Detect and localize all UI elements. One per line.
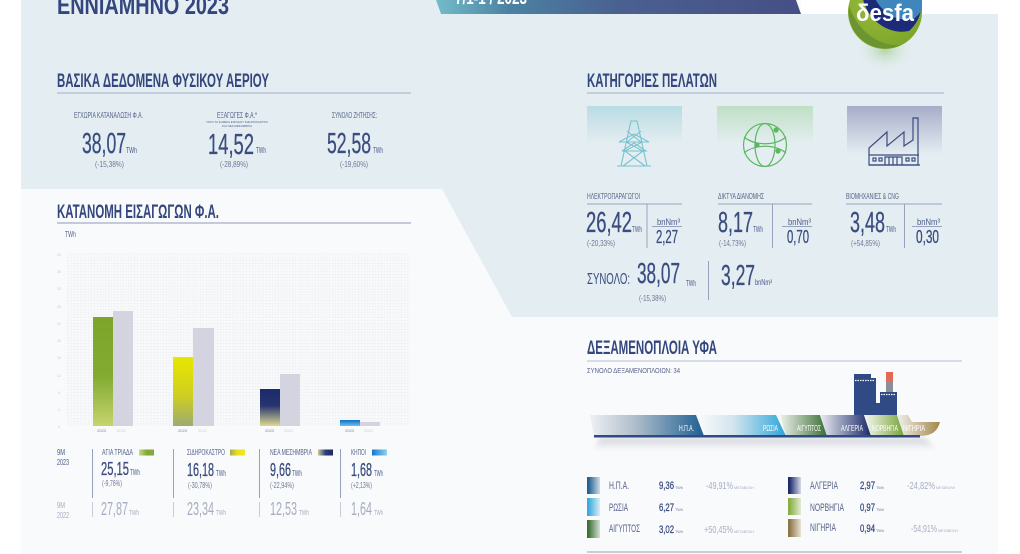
- entry point: Kipoi: TWh: [374, 510, 383, 517]
- logo: desfa: δesfa: [856, 0, 915, 27]
- customer totals: 3,27: [721, 260, 755, 292]
- customer: distribution networks: 0,70: [787, 227, 809, 247]
- customer: industry and CNG: bnNm³: [917, 217, 940, 228]
- customer: distribution networks: [718, 191, 812, 248]
- bar chart: 8: [58, 391, 60, 395]
- ship illustration: ΝΙΓΗΡΙΑ: [903, 424, 925, 433]
- entry point: Nea Mesimvria: [259, 447, 333, 519]
- bar chart: 2022: [198, 428, 208, 433]
- stat: total demand: ΣΥΝΟΛΟ ΖΗΤΗΣΗΣ:: [332, 110, 377, 120]
- legend row: Algeria: ΑΛΓΕΡΙΑ: [810, 480, 838, 492]
- ship illustration: ΡΩΣΙΑ: [763, 424, 778, 433]
- stat: total demand: (-19,60%): [340, 160, 368, 169]
- customer: distribution networks: ΔΙΚΤΥΑ ΔΙΑΝΟΜΗΣ: [718, 191, 764, 201]
- entry point: Sidirokastro: TWh: [216, 510, 226, 517]
- entry point: Kipoi: (+2,13%): [351, 481, 372, 490]
- entry point: Sidirokastro: ΣΙΔΗΡΟΚΑΣΤΡΟ: [187, 447, 225, 457]
- bar chart: 2022: [284, 428, 294, 433]
- legend row: Norway: TWh: [876, 507, 884, 512]
- entry point: Agia Triada: (-9,76%): [102, 479, 122, 488]
- legend row: Nigeria: 0,94: [860, 523, 875, 535]
- legend row: Algeria: -24,82%: [907, 480, 935, 492]
- legend row: Russia: ΡΩΣΙΑ: [609, 502, 628, 514]
- entry point: Kipoi: 1,64: [351, 499, 372, 519]
- ship illustration: ΝΟΡΒΗΓΙΑ: [872, 424, 898, 433]
- stat: exports: (-28,89%): [220, 160, 248, 169]
- customer: distribution networks: bnNm³: [788, 217, 811, 228]
- customer: distribution networks: (-14,73%): [719, 239, 746, 248]
- entry point: Kipoi: ΚΗΠΟΙ: [351, 447, 366, 457]
- bar chart: 28: [57, 305, 61, 309]
- customer totals: [587, 258, 772, 303]
- stat: exports: ΕΞΑΓΩΓΕΣ Φ.Α.*: [217, 110, 257, 120]
- legend row: Algeria: [788, 477, 955, 494]
- entry point: Agia Triada: 25,15: [101, 459, 129, 479]
- entry point: Nea Mesimvria: ΝΕΑ ΜΕΣΗΜΒΡΙΑ: [270, 447, 312, 457]
- customer totals: ΣΥΝΟΛΟ:: [587, 271, 630, 288]
- bar chart: 32: [57, 287, 61, 291]
- entry point: Nea Mesimvria: 9,66: [270, 460, 291, 480]
- entry point: Agia Triada: ΑΓΙΑ ΤΡΙΑΔΑ: [102, 447, 133, 457]
- customer: industry and CNG: (+54,85%): [851, 239, 880, 248]
- legend row: Russia: TWh: [675, 507, 683, 512]
- legend row: USA: -49,91%: [706, 480, 733, 492]
- customer totals: (-15,38%): [639, 294, 666, 303]
- ship illustration: [590, 372, 940, 450]
- heading: ΒΑΣΙΚΑ ΔΕΔΟΜΕΝΑ ΦΥΣΙΚΟΥ ΑΕΡΙΟΥ: [57, 71, 269, 92]
- legend row: USA: [587, 477, 754, 494]
- heading: ΚΑΤΑΝΟΜΗ ΕΙΣΑΓΩΓΩΝ Φ.Α.: [57, 202, 219, 223]
- customer: power producers: 2,27: [656, 227, 678, 247]
- customer: power producers: [586, 191, 682, 248]
- legend row: Egypt: 3,02: [659, 524, 674, 536]
- bar chart: TWh: [65, 229, 76, 239]
- panel: customer categories: [586, 71, 944, 303]
- customer: distribution networks: TWh: [753, 225, 763, 234]
- ship illustration: ΑΛΓΕΡΙΑ: [841, 424, 863, 433]
- legend row: USA: Η.Π.Α.: [609, 480, 629, 492]
- bar chart: 2023: [345, 428, 355, 433]
- customer: industry and CNG: TWh: [886, 225, 896, 234]
- entry point: Nea Mesimvria: (-22,94%): [270, 481, 294, 490]
- bar chart: 16: [57, 356, 61, 360]
- bar chart: 40: [57, 253, 61, 257]
- customer: industry and CNG: ΒΙΟΜΗΧΑΝΙΕΣ & CNG: [846, 191, 899, 201]
- legend row: Nigeria: ΝΙΓΗΡΙΑ: [810, 522, 836, 534]
- entry point: Kipoi: [340, 447, 387, 519]
- customer: power producers: (-20,33%): [587, 239, 615, 248]
- stat: domestic consumption: ΕΓΧΩΡΙΑ ΚΑΤΑΝΑΛΩΣΗ Φ.Α.: [74, 110, 143, 120]
- stat: exports: [206, 110, 269, 169]
- entry point: Sidirokastro: TWh: [216, 469, 226, 478]
- panel: LNG tankers: [587, 338, 962, 552]
- bar chart: 4: [58, 408, 60, 412]
- stat: exports: 14,52: [208, 129, 254, 161]
- stat: total demand: TWh: [373, 146, 383, 155]
- legend row: USA: TWh: [675, 485, 683, 490]
- bar chart: 24: [57, 322, 61, 326]
- legend row: Algeria: TWh: [876, 485, 884, 490]
- entry point: Sidirokastro: 16,18: [187, 460, 214, 480]
- stat: exports: ΚΑΙ ΝΕΑ ΜΕΣΗΜΒΡΙΑ: [222, 124, 252, 128]
- stat: exports: TWh: [256, 146, 266, 155]
- entry point: Agia Triada: 27,87: [101, 499, 128, 519]
- legend row: Egypt: +50,45%: [704, 524, 733, 536]
- customer totals: bnNm³: [755, 278, 772, 287]
- customer: power producers: TWh: [632, 225, 642, 234]
- bar chart: 2022: [364, 428, 374, 433]
- stat: domestic consumption: (-15,38%): [95, 160, 124, 169]
- stat: domestic consumption: TWh: [126, 146, 137, 155]
- customer: distribution networks: 8,17: [718, 207, 753, 239]
- bar chart: 36: [57, 270, 61, 274]
- ship illustration: Η.Π.Α.: [679, 424, 694, 433]
- legend row: Nigeria: [788, 519, 958, 537]
- date banner: [436, 0, 801, 14]
- bar chart: 0: [58, 425, 60, 429]
- total tankers: ΣΥΝΟΛΟ ΔΕΞΑΜΕΝΟΠΛΟΙΩΝ: 34: [587, 366, 680, 375]
- row labels: 9M 2023 and 9M 2022: 9M: [57, 447, 65, 457]
- customer: power producers: ΗΛΕΚΤΡΟΠΑΡΑΓΩΓΟΙ: [587, 191, 640, 201]
- legend row: Algeria: ΜΕΤΑΒΟΛΗ: [936, 485, 955, 490]
- row labels: 9M 2023 and 9M 2022: 9M: [57, 500, 65, 510]
- bar chart: 20: [57, 339, 61, 343]
- legend row: Egypt: ΜΕΤΑΒΟΛΗ: [734, 529, 754, 534]
- customer: power producers: bnNm³: [657, 217, 680, 228]
- legend row: Nigeria: TWh: [876, 528, 884, 533]
- legend row: Russia: 6,27: [659, 502, 674, 514]
- legend row: Norway: ΝΟΡΒΗΓΙΑ: [810, 502, 844, 514]
- bar chart: 2023: [97, 428, 107, 433]
- entry point: Nea Mesimvria: 12,53: [270, 499, 297, 519]
- bar chart: 2023: [178, 428, 188, 433]
- legend row: Nigeria: -54,91%: [911, 523, 937, 535]
- entry point: Sidirokastro: 23,34: [187, 499, 214, 519]
- legend row: Egypt: [587, 520, 754, 538]
- icon: factory: [847, 106, 942, 170]
- ship illustration: ΑΙΓΥΠΤΟΣ: [797, 424, 821, 433]
- customer totals: 38,07: [637, 258, 680, 290]
- icon: globe network: [717, 106, 813, 168]
- legend row: Egypt: TWh: [675, 529, 683, 534]
- stat: total demand: [327, 110, 383, 169]
- heading: ΚΑΤΗΓΟΡΙΕΣ ΠΕΛΑΤΩΝ: [587, 71, 717, 92]
- heading: ΔΕΞΑΜΕΝΟΠΛΟΙΑ ΥΦΑ: [587, 338, 717, 359]
- entry point: Agia Triada: TWh: [130, 468, 140, 477]
- legend row: Norway: 0,97: [860, 502, 875, 514]
- legend row: USA: ΜΕΤΑΒΟΛΗ: [734, 485, 754, 490]
- customer: industry and CNG: 0,30: [916, 227, 939, 247]
- entry point: Agia Triada: TWh: [129, 510, 139, 517]
- entry point: Nea Mesimvria: TWh: [299, 510, 309, 517]
- customer totals: TWh: [686, 279, 696, 288]
- bar chart: 2023: [265, 428, 275, 433]
- stat: domestic consumption: 38,07: [82, 128, 126, 160]
- legend row: Nigeria: ΜΕΤΑΒΟΛΗ: [938, 528, 958, 533]
- entry point: Agia Triada: [92, 447, 154, 519]
- bar chart: 12: [57, 374, 61, 378]
- row labels: 9M 2023 and 9M 2022: [57, 447, 69, 520]
- panel: imports distribution: [57, 202, 411, 520]
- icon: power pylon: [587, 106, 682, 168]
- legend row: USA: 9,36: [659, 480, 674, 492]
- entry point: Kipoi: TWh: [374, 469, 383, 478]
- row labels: 9M 2023 and 9M 2022: 2022: [57, 510, 69, 520]
- stat: domestic consumption: [74, 110, 143, 169]
- entry point: Kipoi: 1,68: [351, 460, 372, 480]
- row labels: 9M 2023 and 9M 2022: 2023: [57, 457, 69, 467]
- panel: key natural gas data: [57, 71, 411, 169]
- legend row: Algeria: 2,97: [860, 480, 875, 492]
- customer: power producers: 26,42: [586, 207, 632, 239]
- entry point: Sidirokastro: (-30,78%): [188, 481, 212, 490]
- customer: industry and CNG: [846, 191, 942, 248]
- bar chart: 2022: [117, 428, 127, 433]
- bar chart: [57, 229, 410, 433]
- customer: industry and CNG: 3,48: [850, 207, 885, 239]
- entry point: Sidirokastro: [173, 447, 245, 519]
- entry point: Nea Mesimvria: TWh: [292, 469, 302, 478]
- stat: total demand: 52,58: [327, 128, 371, 160]
- legend row: Russia: [587, 498, 683, 516]
- logo: desfa: [848, 0, 922, 72]
- legend row: Egypt: ΑΙΓΥΠΤΟΣ: [609, 523, 640, 535]
- legend row: Norway: [788, 498, 884, 515]
- stat: exports: *ΑΠΟ ΤΑ ΣΗΜΕΙΑ ΕΙΣΟΔΟΥ ΣΙΔΗΡΟΚΑΣΤΡΟ: [206, 120, 269, 124]
